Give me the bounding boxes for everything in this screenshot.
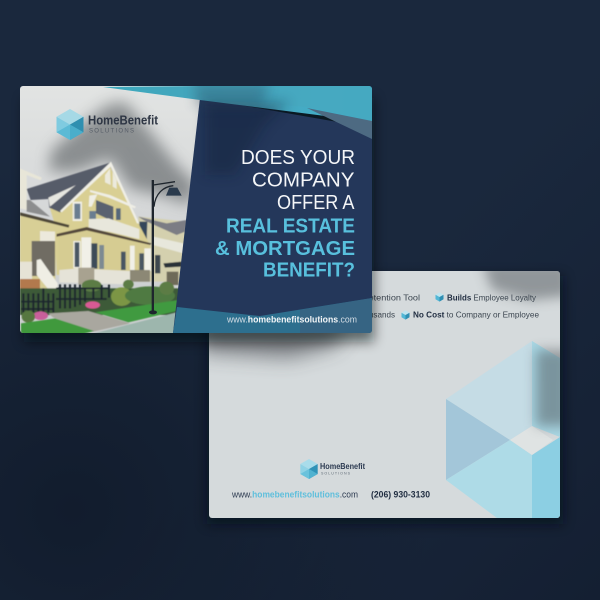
headline: DOES YOUR	[241, 146, 355, 169]
panel shadow	[205, 102, 290, 175]
front website: www.homebenefitsolutions.com	[226, 314, 357, 324]
roof	[27, 162, 111, 212]
back logo: HomeBenefit	[320, 462, 365, 471]
top teal band	[103, 82, 372, 139]
front logo: SOLUTIONS	[89, 128, 134, 134]
walkway	[48, 311, 130, 332]
benefit row two: Thousands	[355, 310, 395, 320]
headline: BENEFIT?	[263, 259, 355, 282]
porch roof	[55, 227, 152, 245]
balcony rail	[89, 218, 139, 239]
benefit row one: Retention Tool	[362, 292, 420, 302]
headline: COMPANY	[252, 169, 355, 192]
right neighbour house	[138, 217, 187, 282]
flowers	[85, 301, 100, 309]
icon: cube	[435, 292, 444, 302]
benefit row one	[372, 292, 536, 302]
icon: logo cube	[57, 109, 83, 140]
headline: OFFER A	[277, 191, 355, 214]
street lamp	[149, 180, 182, 314]
front card cast shadow	[200, 325, 345, 358]
benefit row one: Builds Employee Loyalty	[447, 292, 537, 302]
benefit row two	[372, 310, 539, 320]
bottom teal band	[173, 298, 372, 333]
benefit row two: No Cost to Company or Employee	[413, 310, 539, 320]
back logo: SOLUTIONS	[321, 472, 351, 476]
icon: cube	[401, 310, 410, 320]
back phone number: (206) 930-3130	[371, 490, 430, 500]
lawns	[95, 300, 178, 322]
columns	[81, 237, 91, 268]
headline: REAL ESTATE	[226, 214, 355, 237]
headline	[215, 146, 355, 282]
sidewalk	[94, 312, 176, 333]
card shadow: front card	[24, 98, 374, 342]
bushes	[82, 280, 175, 306]
fence	[21, 284, 110, 312]
hexagon graphic	[446, 341, 560, 518]
front logo	[57, 109, 159, 140]
dark panel	[173, 98, 372, 333]
panel: back of postcard	[200, 262, 570, 518]
foliage shadow	[482, 262, 570, 426]
front logo: HomeBenefit	[88, 114, 159, 128]
porch wall	[58, 231, 150, 272]
grass base	[20, 288, 180, 315]
card shadow: back card	[207, 276, 563, 524]
left house	[20, 215, 58, 289]
icon: logo cube	[300, 459, 318, 479]
photo: craftsman houses	[17, 85, 203, 338]
main house wall	[50, 167, 150, 275]
back website: www.homebenefitsolutions.com	[231, 490, 358, 500]
back logo	[300, 459, 365, 479]
gable trim	[60, 162, 139, 223]
cloud shadow	[48, 102, 197, 205]
porch rail	[59, 268, 130, 284]
panel: front of postcard	[17, 82, 372, 338]
headline: & MORTGAGE	[215, 237, 355, 260]
